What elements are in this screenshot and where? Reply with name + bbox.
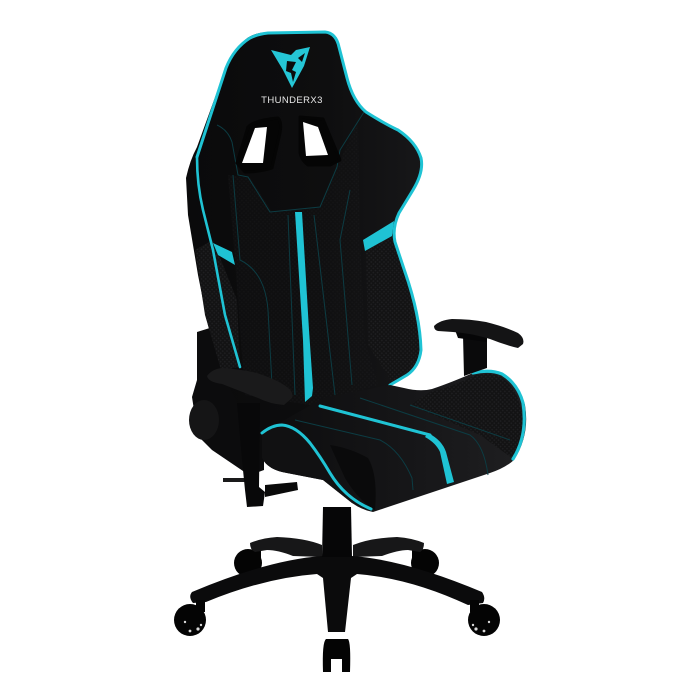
seat shell <box>262 371 526 512</box>
seat cushion <box>262 371 526 512</box>
caster wheels, rear <box>234 548 439 577</box>
seams <box>217 112 364 395</box>
caster wheels, front <box>174 600 500 672</box>
textured lower panels <box>195 240 240 370</box>
gas lift column <box>322 507 352 557</box>
backrest shell <box>186 31 423 410</box>
backrest <box>186 31 423 410</box>
rear base arms <box>250 537 424 557</box>
right textured bolster <box>410 374 523 458</box>
cyan seat piping <box>262 371 524 509</box>
logo emblem <box>271 47 310 88</box>
headrest slot left <box>237 118 281 172</box>
right armrest <box>434 319 523 376</box>
side bolster <box>262 427 372 509</box>
headrest slot right <box>300 117 340 165</box>
brand name: THUNDERX3 <box>261 95 323 106</box>
front base arms <box>190 556 484 632</box>
cyan seat stripe <box>425 433 454 484</box>
cyan centre stripe <box>295 212 313 402</box>
left armrest <box>207 368 292 507</box>
recline mechanism <box>189 327 330 497</box>
seat seams <box>295 398 510 490</box>
cyan side stripes <box>213 243 235 265</box>
cyan piping along backrest <box>197 32 422 385</box>
